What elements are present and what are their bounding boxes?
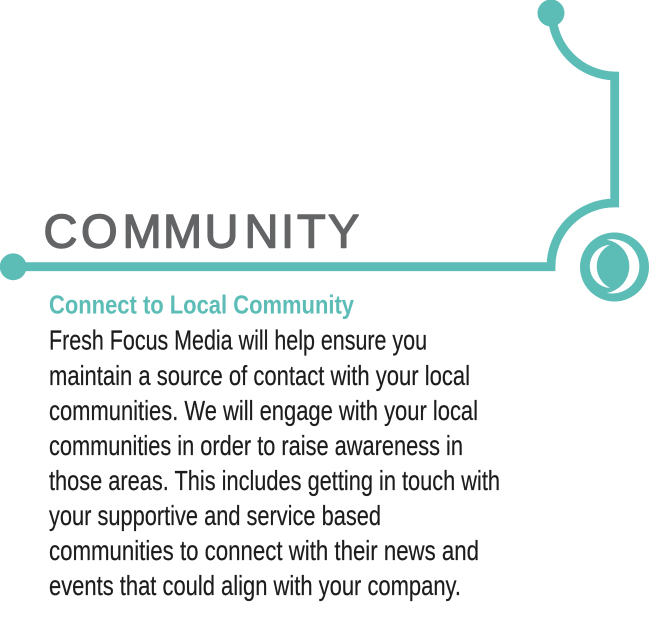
body text: events that could align with your company. [49,570,461,601]
body text: Fresh Focus Media will help ensure you [49,324,427,356]
subheading: Connect to Local Community [49,290,354,320]
icon: circular logo [580,232,649,302]
body text: your supportive and service based [49,500,381,531]
body text: those areas. This includes getting in touch with [49,465,500,496]
body text [49,324,500,601]
body text: communities. We will engage with your local [49,395,478,426]
body text: maintain a source of contact with your local [49,360,470,391]
body text: communities in order to raise awareness in [49,430,463,461]
body text: communities to connect with their news and [49,535,479,566]
connector line with end dots [0,0,615,280]
title: COMMUNITY [44,204,359,257]
